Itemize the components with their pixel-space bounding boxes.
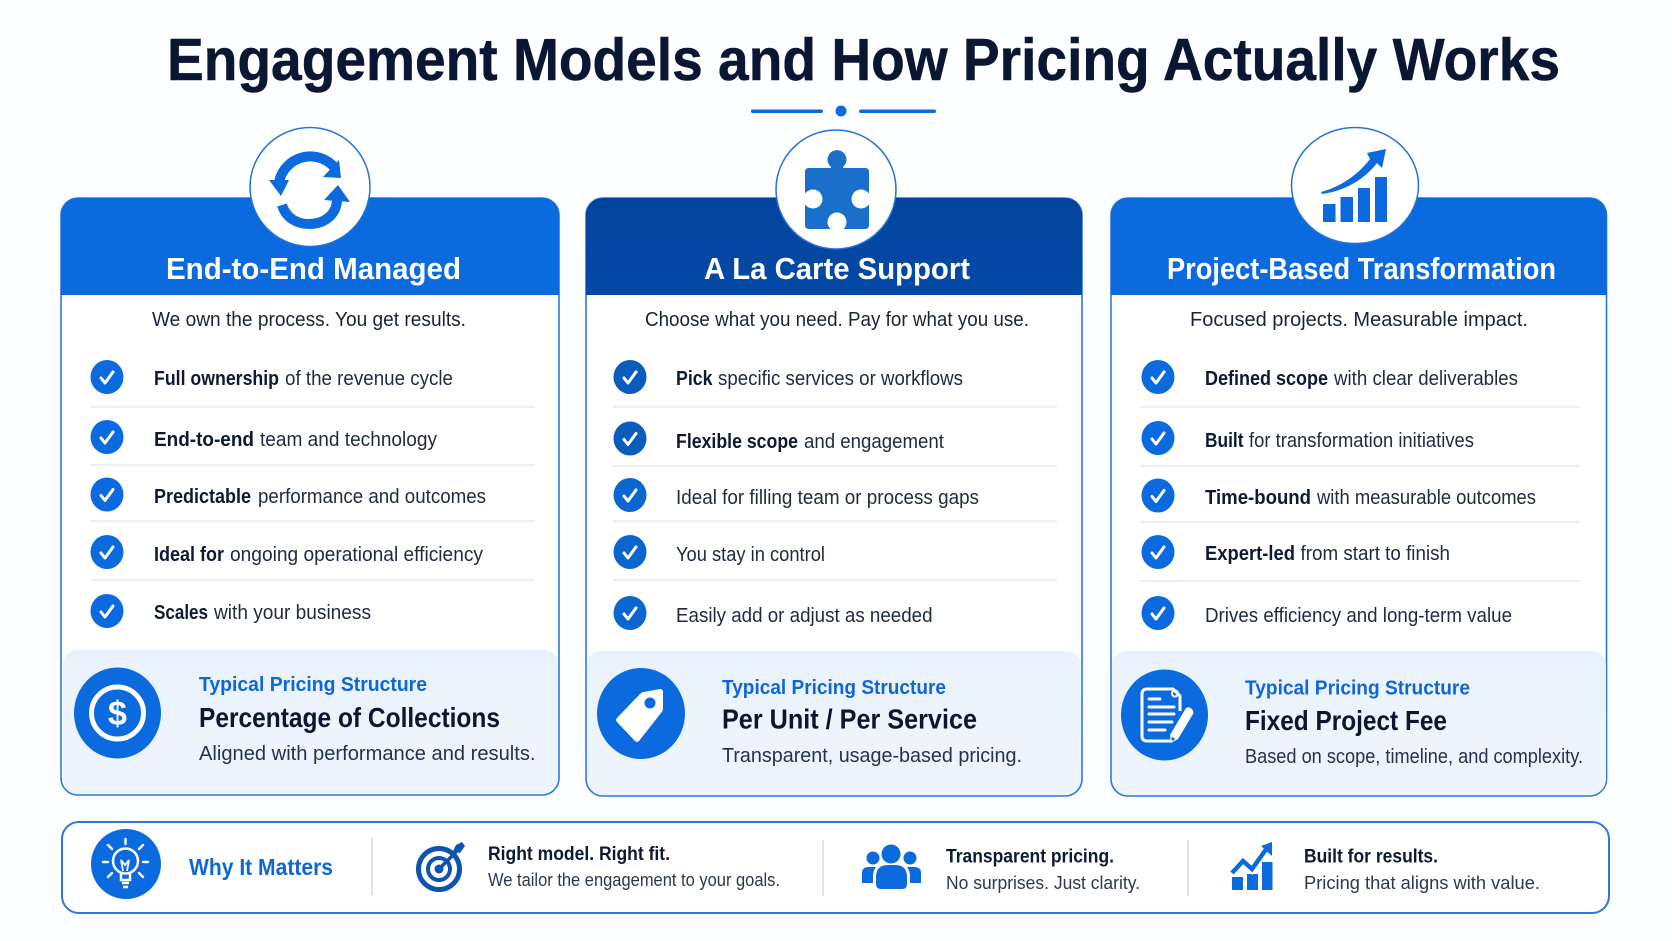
pricing panel: Based on scope, timeline, and complexity. — [1245, 746, 1583, 768]
list item 2: for transformation initiatives — [1249, 430, 1474, 452]
list item 5: Scales — [154, 602, 208, 624]
tagline: Choose what you need. Pay for what you use. — [645, 308, 1029, 331]
benefit: transparent pricing: No surprises. Just clarity. — [946, 872, 1140, 893]
benefit: transparent pricing — [946, 846, 1140, 893]
list item 1: Pick — [676, 368, 713, 390]
icon: lightbulb — [91, 829, 161, 899]
panel: Project-Based Transformation — [1111, 128, 1606, 796]
icon: document and pencil — [1121, 670, 1208, 760]
list item 2: Flexible scope — [676, 431, 798, 453]
list item 2 — [614, 422, 944, 456]
title divider — [751, 106, 936, 116]
list item 4: Ideal for — [154, 544, 224, 566]
list item 4: from start to finish — [1300, 543, 1450, 565]
heading: A La Carte Support — [704, 251, 970, 286]
benefit: built for results: Built for results. — [1304, 846, 1438, 868]
list item 4: Expert-led — [1205, 543, 1295, 565]
icon: dollar coin — [74, 668, 161, 758]
list item 5: Drives efficiency and long-term value — [1205, 605, 1512, 627]
pricing panel: Per Unit / Per Service — [722, 704, 977, 734]
pricing panel — [587, 651, 1081, 795]
icon: target — [418, 842, 465, 890]
benefit: built for results — [1304, 846, 1540, 893]
card body — [1111, 198, 1606, 796]
benefit: right model: We tailor the engagement to your goals. — [488, 869, 780, 890]
icon: dollar coin: $ — [108, 695, 127, 733]
list item 3: Predictable — [154, 486, 251, 508]
pricing panel: Typical Pricing Structure — [722, 676, 946, 699]
card header band — [1111, 198, 1606, 295]
pricing panel: Percentage of Collections — [199, 702, 500, 733]
pricing panel: Typical Pricing Structure — [199, 673, 427, 696]
tagline: Focused projects. Measurable impact. — [1190, 308, 1528, 331]
benefit: transparent pricing: Transparent pricing. — [946, 846, 1114, 868]
list item 3: performance and outcomes — [258, 486, 486, 508]
icon: people — [862, 844, 921, 889]
card body — [61, 198, 559, 795]
list item 4 — [614, 535, 825, 569]
pricing panel — [63, 650, 558, 794]
icon: sync arrows — [250, 128, 370, 246]
list item 1: Defined scope — [1205, 368, 1328, 390]
list item 2: Built — [1205, 430, 1244, 452]
list item 2 — [1142, 421, 1474, 455]
pricing panel: Fixed Project Fee — [1245, 705, 1447, 736]
panel: A La Carte Support — [586, 130, 1082, 796]
list item 4: You stay in control — [676, 544, 825, 566]
list item 5: Easily add or adjust as needed — [676, 605, 932, 627]
list item 5 — [614, 596, 932, 630]
pricing panel: Transparent, usage-based pricing. — [722, 745, 1022, 767]
list item 1 — [1142, 360, 1518, 394]
list item 1: of the revenue cycle — [285, 368, 453, 390]
list item 3 — [1142, 478, 1536, 512]
card header band — [61, 198, 559, 295]
list item 2 — [90, 420, 437, 454]
list item 4 — [90, 535, 483, 569]
title: Engagement Models and How Pricing Actually Works — [167, 27, 1560, 93]
heading: Project-Based Transformation — [1167, 251, 1556, 286]
list item 3 — [614, 478, 979, 512]
list item 5 — [90, 594, 371, 628]
card header band — [586, 198, 1082, 295]
icon: price tag — [597, 668, 685, 759]
list item 2: End-to-end — [154, 429, 254, 451]
list item 1 — [90, 360, 453, 394]
icon: results chart — [1232, 842, 1272, 890]
list item 3 — [90, 478, 486, 512]
list item 1: specific services or workflows — [718, 368, 963, 390]
list item 4: ongoing operational efficiency — [230, 544, 483, 566]
list item 1: Full ownership — [154, 368, 279, 390]
list item 3: Time-bound — [1205, 487, 1311, 509]
list item 1: with clear deliverables — [1333, 368, 1518, 390]
card body — [586, 198, 1082, 796]
list item 2: team and technology — [260, 429, 437, 451]
benefit: right model — [488, 844, 780, 890]
pricing panel: Typical Pricing Structure — [1245, 676, 1470, 700]
list item 2: and engagement — [804, 431, 944, 453]
icon: puzzle piece — [776, 130, 896, 249]
heading: Why It Matters — [189, 854, 333, 880]
pricing panel: Aligned with performance and results. — [199, 743, 536, 765]
list item 5 — [1142, 596, 1512, 630]
panel: Why It Matters bar — [62, 822, 1609, 913]
list item 5: with your business — [213, 602, 371, 624]
tagline: We own the process. You get results. — [152, 308, 466, 331]
benefit: right model: Right model. Right fit. — [488, 844, 670, 865]
list item 1 — [614, 360, 963, 394]
benefit: built for results: Pricing that aligns with value. — [1304, 872, 1540, 893]
icon: growth chart — [1292, 128, 1418, 244]
list item 3: with measurable outcomes — [1316, 487, 1536, 509]
pricing panel — [1112, 651, 1606, 795]
heading: End-to-End Managed — [166, 251, 461, 286]
list item 3: Ideal for filling team or process gaps — [676, 487, 979, 509]
panel: End-to-End Managed — [61, 128, 559, 795]
list item 4 — [1142, 535, 1450, 569]
